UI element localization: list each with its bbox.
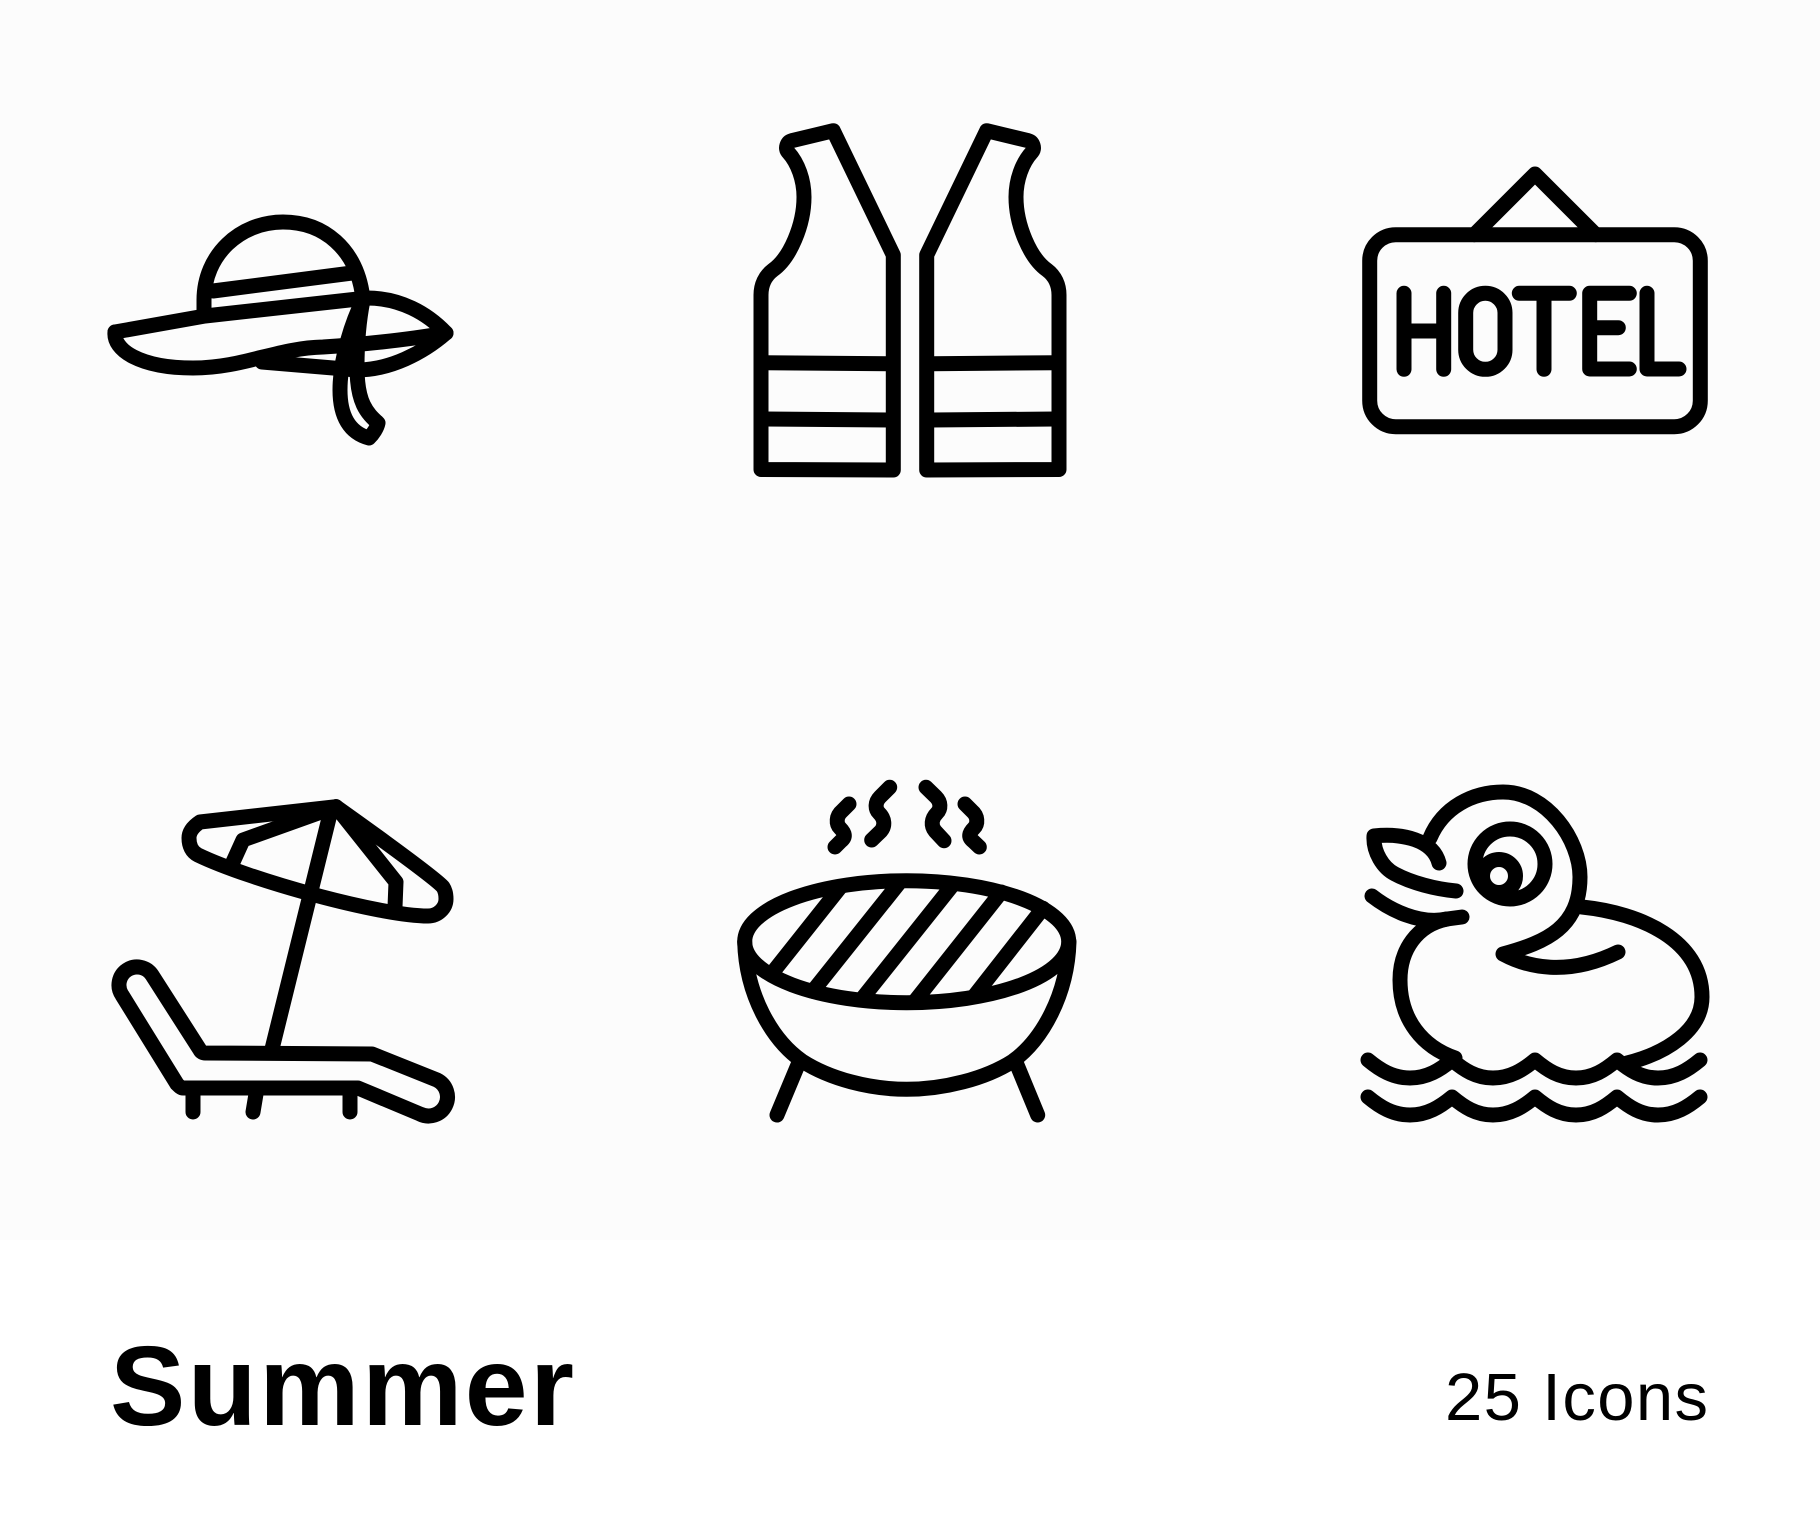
icon: beach lounger with umbrella xyxy=(119,807,447,1116)
icon: hotel sign xyxy=(1370,174,1700,427)
icon count label: 25 Icons xyxy=(1445,1360,1708,1435)
title: Summer xyxy=(110,1323,574,1449)
icon: rubber duck on water xyxy=(1368,792,1702,1115)
icon: sun hat xyxy=(115,222,446,438)
vest: left panel xyxy=(761,131,893,470)
vest: right panel xyxy=(927,131,1059,470)
icon: life vest xyxy=(761,131,1059,470)
icon: barbecue grill xyxy=(745,787,1069,1115)
